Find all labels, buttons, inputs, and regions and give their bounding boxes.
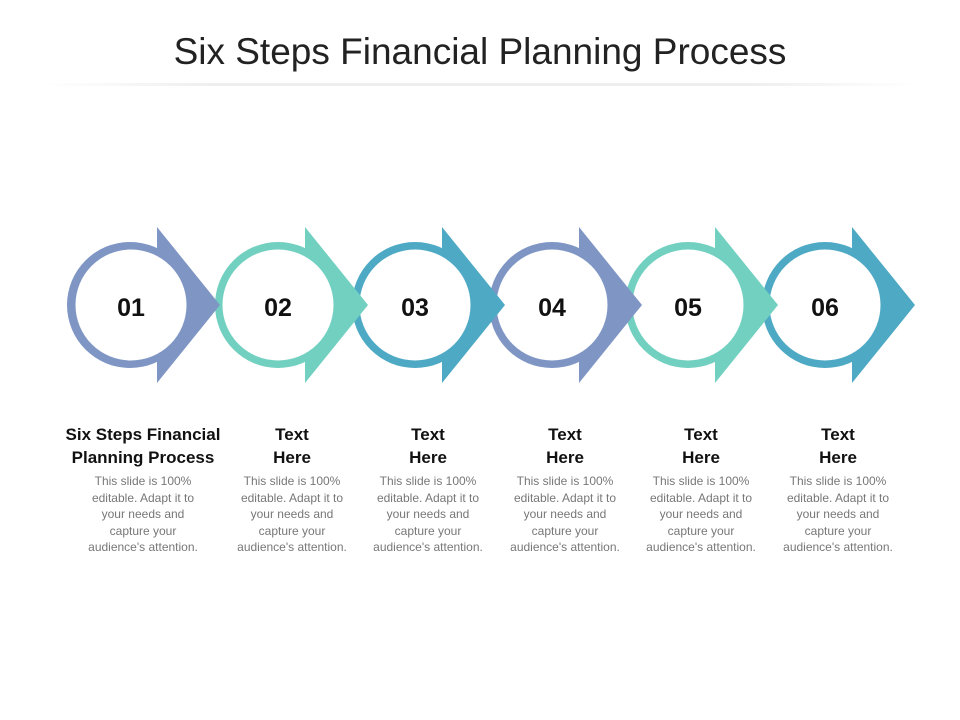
step 01 shape: 01 [117, 294, 145, 322]
text: step 2: This slide is 100% editable. Adapt it to your needs and capture your audience's attention. [237, 474, 347, 554]
text: step 3 [373, 425, 483, 554]
text: step 5: Here [682, 448, 720, 467]
step 03 shape [352, 227, 505, 383]
step 06 shape [762, 227, 915, 383]
step 03 shape: 03 [401, 294, 429, 322]
text: step 4: This slide is 100% editable. Adapt it to your needs and capture your audience's attention. [510, 474, 620, 554]
step 04 shape: 04 [538, 294, 566, 322]
text: step 3: Text [411, 425, 445, 444]
step 02 shape: 02 [264, 294, 292, 322]
text: step 4: Text [548, 425, 582, 444]
step 02 shape [215, 227, 368, 383]
text: step 6: This slide is 100% editable. Adapt it to your needs and capture your audience's attention. [783, 474, 893, 554]
text: step 6: Text [821, 425, 855, 444]
text: step 6: Here [819, 448, 857, 467]
text: step 1 [66, 425, 220, 554]
text: step 2: Here [273, 448, 311, 467]
title: Six Steps Financial Planning Process [174, 31, 786, 72]
text: step 6 [783, 425, 893, 554]
text: step 1: Six Steps Financial [66, 425, 220, 444]
step 04 shape [489, 227, 642, 383]
text: step 1: Planning Process [72, 448, 214, 467]
text: step 5: This slide is 100% editable. Adapt it to your needs and capture your audience's attention. [646, 474, 756, 554]
text: step 4 [510, 425, 620, 554]
step 05 shape [625, 227, 778, 383]
text: step 5 [646, 425, 756, 554]
step 05 shape: 05 [674, 294, 702, 322]
text: step 1: This slide is 100% editable. Adapt it to your needs and capture your audience's attention. [88, 474, 198, 554]
text: step 4: Here [546, 448, 584, 467]
text: step 5: Text [684, 425, 718, 444]
text: step 3: Here [409, 448, 447, 467]
text: step 3: This slide is 100% editable. Adapt it to your needs and capture your audience's attention. [373, 474, 483, 554]
text: step 2 [237, 425, 347, 554]
step 06 shape: 06 [811, 294, 839, 322]
step 01 shape [67, 227, 220, 383]
text: step 2: Text [275, 425, 309, 444]
